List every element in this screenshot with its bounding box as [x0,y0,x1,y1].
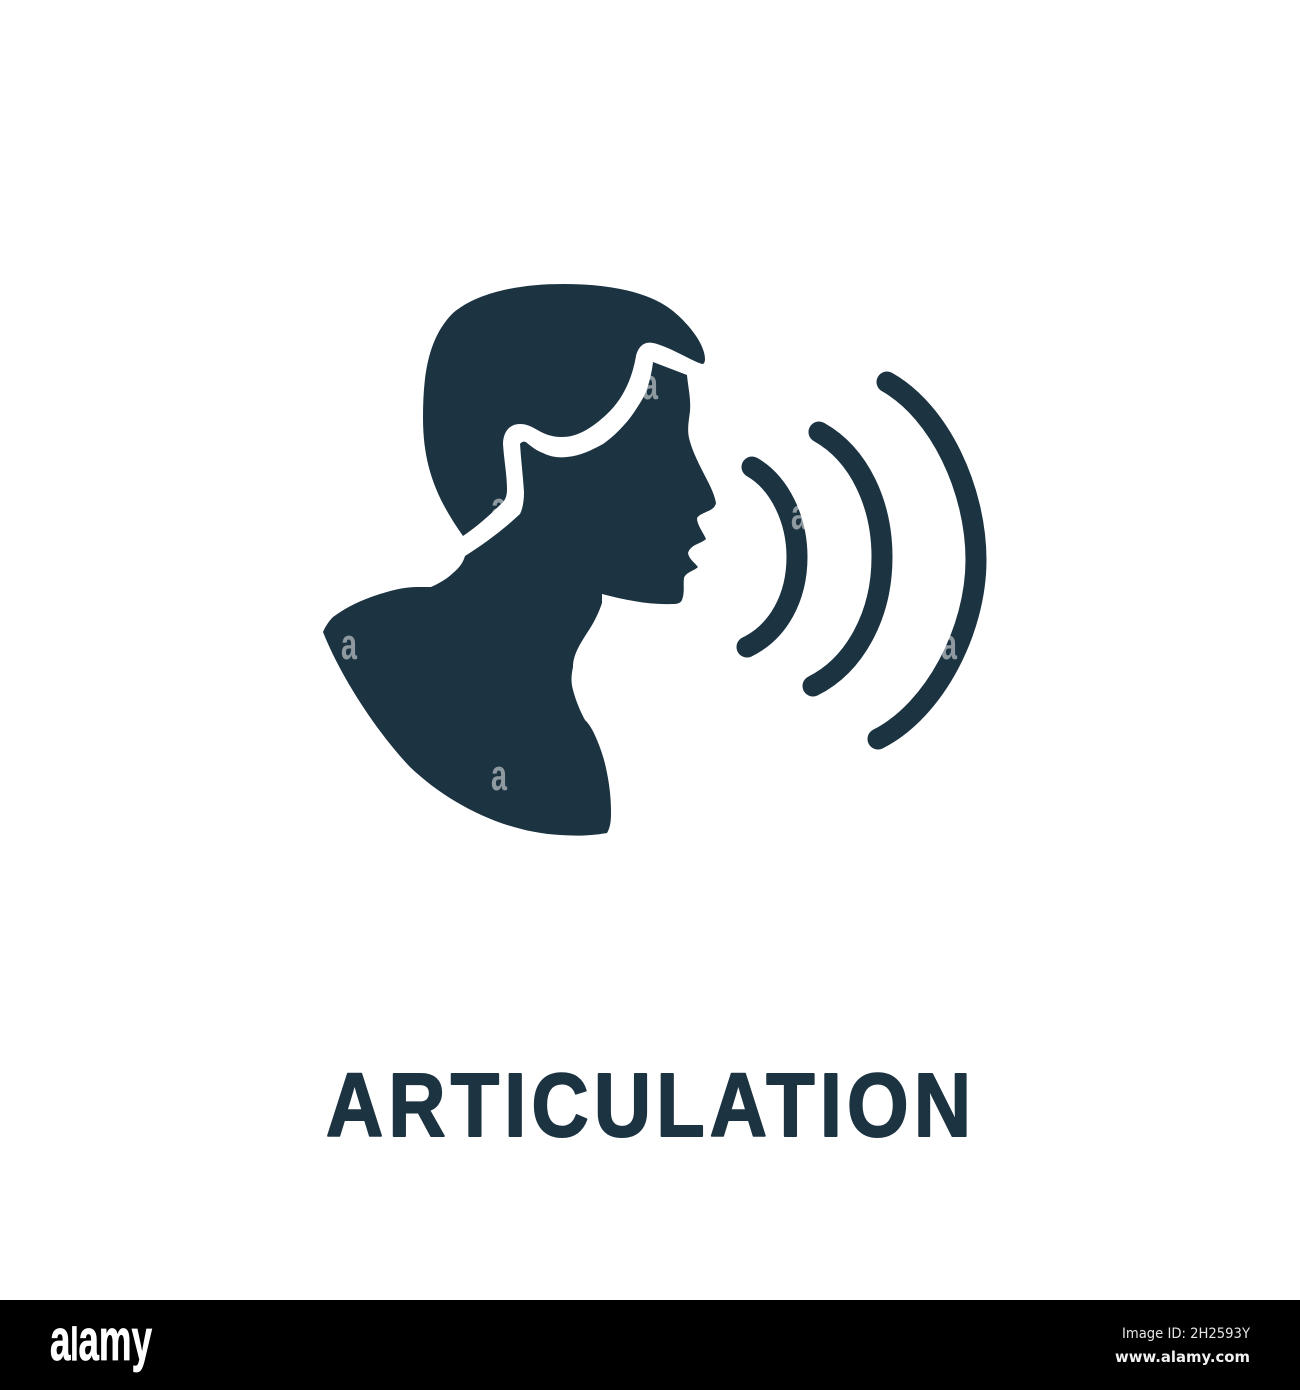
title: ARTICULATION [326,1054,971,1155]
footer bar [0,1300,1300,1390]
large wave [878,382,976,739]
icon: sound waves [747,382,976,739]
watermark marks: a [791,490,807,539]
footer logo: alamy [50,1308,152,1373]
website: www.alamy.com [1115,1348,1250,1366]
hair [423,284,705,536]
icon: head silhouette [323,284,716,836]
watermark marks: a [491,751,507,800]
watermark marks: a [491,483,507,532]
face, neck and shoulders [323,362,716,836]
watermark marks: a [341,620,357,669]
small wave [747,467,797,647]
watermark marks: a [941,620,957,669]
image id: Image ID: 2H2593Y [1122,1326,1250,1342]
middle wave [813,432,882,686]
icon: speaking head with sound waves [323,284,976,836]
watermark marks: a [642,360,658,409]
watermark marks [341,360,957,800]
